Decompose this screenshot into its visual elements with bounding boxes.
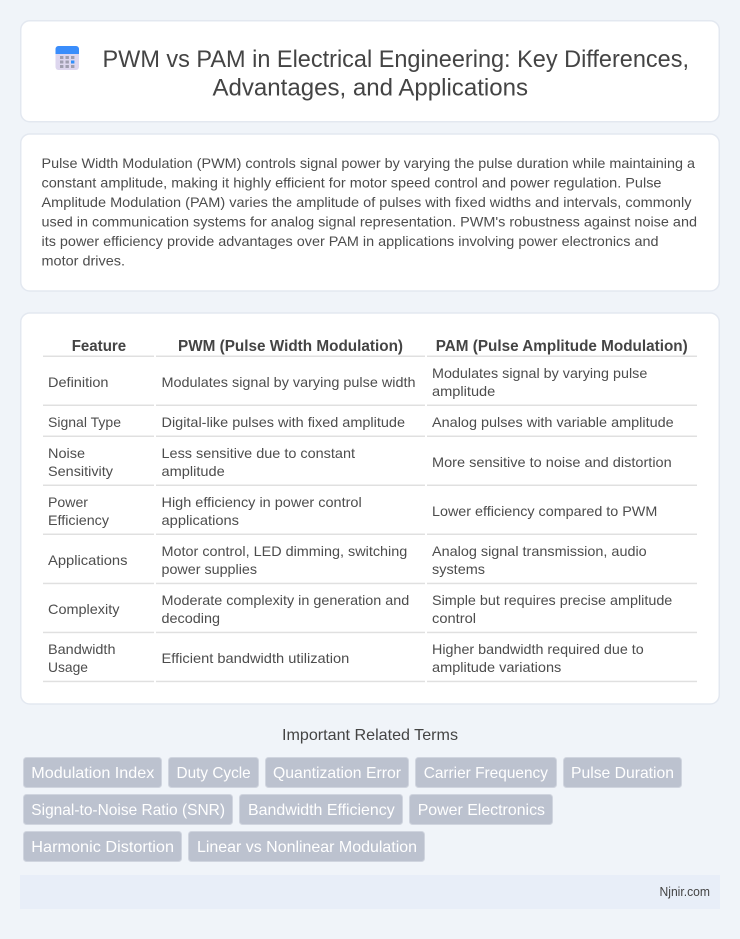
row: bandwidth usage: Efficient bandwidth utilization [162,650,349,666]
panel: comparison table [21,313,719,704]
text block: summary [42,155,697,268]
text block: summary: used in communication systems for analog signal representation. PWM's robustness against noise and [42,214,697,230]
row: bandwidth usage [48,641,644,675]
title: PWM vs PAM in Electrical Engineering: Key Differences, [102,46,689,73]
icon: calendar [56,46,79,70]
text block: summary: its power efficiency provide advantages over PAM in applications involving power electronics and [42,233,658,249]
row: complexity: Complexity [48,601,120,617]
table header: PWM (Pulse Width Modulation) [178,338,403,355]
tag list: related terms: Quantization Error [273,765,402,782]
row: applications: Applications [48,552,128,568]
row: signal type: Analog pulses with variable amplitude [432,414,674,430]
tag list: related terms: Duty Cycle [176,765,251,782]
row: definition: Definition [48,374,108,390]
row: bandwidth usage: Higher bandwidth required due to [432,641,644,657]
text block: summary: Pulse Width Modulation (PWM) controls signal power by varying the pulse duration while maintaining a [42,155,695,171]
title: Advantages, and Applications [212,74,528,102]
row: noise sensitivity: More sensitive to noise and distortion [432,454,672,470]
row: bandwidth usage: amplitude variations [432,659,561,675]
row: power efficiency: High efficiency in power control [162,494,362,510]
title [102,46,689,102]
footer: Njnir.com [660,884,710,899]
row: bandwidth usage: Bandwidth [48,641,116,657]
row: definition [48,365,648,399]
row: definition: amplitude [432,383,496,399]
tag list: related terms: Pulse Duration [571,765,674,782]
row: complexity [48,592,673,626]
table header: Feature [72,338,126,355]
tag list: related terms: Bandwidth Efficiency [248,802,395,819]
row: power efficiency [48,494,657,528]
row: bandwidth usage: Usage [48,659,88,675]
tag list: related terms: Signal-to-Noise Ratio (SNR) [31,802,225,819]
row: power efficiency: Efficiency [48,512,109,528]
row: applications: Analog signal transmission, audio [432,543,647,559]
row: complexity: Simple but requires precise amplitude [432,592,673,608]
row: applications: systems [432,561,485,577]
row: signal type: Digital-like pulses with fixed amplitude [162,414,405,430]
row: signal type: Signal Type [48,414,121,430]
row: complexity: decoding [162,610,220,626]
heading: important related terms: Important Related Terms [282,727,458,744]
row: noise sensitivity [48,445,672,479]
panel: intro paragraph [21,134,719,291]
row: noise sensitivity: Sensitivity [48,463,113,479]
row: noise sensitivity: amplitude [162,463,225,479]
text block: summary: Amplitude Modulation (PAM) varies the amplitude of pulses with fixed widths and intervals, commonly [42,194,692,210]
tag list: related terms: Linear vs Nonlinear Modulation [197,839,417,856]
row: applications: power supplies [162,561,257,577]
row: complexity: Moderate complexity in generation and [162,592,409,608]
row: definition: Modulates signal by varying pulse [432,365,648,381]
row: complexity: control [432,610,476,626]
row: noise sensitivity: Noise [48,445,85,461]
row: power efficiency: Power [48,494,88,510]
tag list: related terms [24,758,682,862]
tag list: related terms: Harmonic Distortion [31,839,174,856]
table header: PAM (Pulse Amplitude Modulation) [436,338,688,355]
tag list: related terms: Modulation Index [31,765,154,782]
row: definition: Modulates signal by varying pulse width [162,374,416,390]
table header [72,338,688,355]
footer [20,875,720,909]
row: applications [48,543,647,577]
text block: summary: motor drives. [42,252,125,268]
row: applications: Motor control, LED dimming, switching [162,543,407,559]
text block: summary: constant amplitude, making it highly efficient for motor speed control and power regulation. Pulse [42,174,662,190]
row: signal type [48,414,674,430]
row: power efficiency: applications [162,512,239,528]
row: power efficiency: Lower efficiency compared to PWM [432,503,657,519]
tag list: related terms: Power Electronics [418,802,545,819]
tag list: related terms: Carrier Frequency [424,765,548,782]
panel: title card [21,21,719,122]
row: noise sensitivity: Less sensitive due to constant [162,445,355,461]
